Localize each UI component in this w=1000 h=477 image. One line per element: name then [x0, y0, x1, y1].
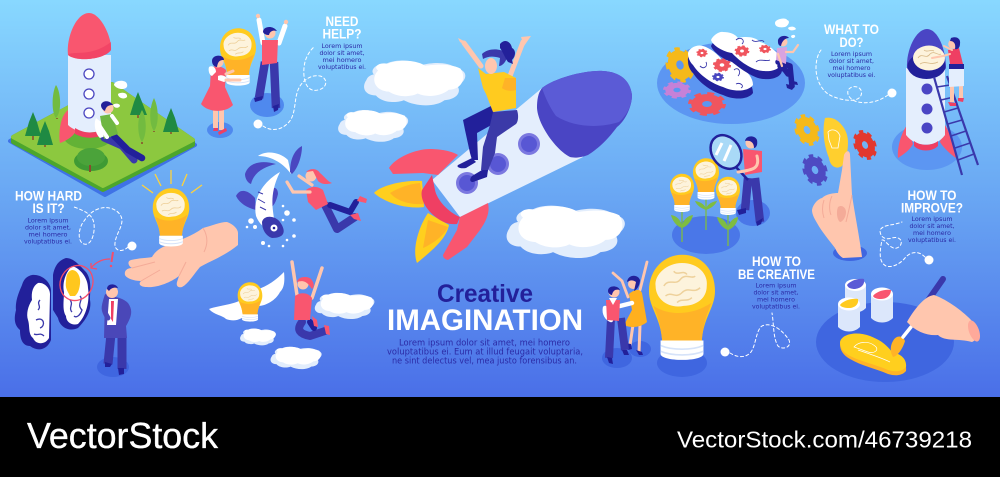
- text: how hard: [15, 188, 82, 246]
- left lobe: [688, 45, 753, 99]
- shadow: [833, 245, 867, 261]
- hand: [812, 151, 862, 258]
- text: what to do: [824, 22, 879, 79]
- text: how to be creative: dolor sit amet,: [754, 288, 798, 296]
- panel: big rocket with woman: [374, 36, 632, 263]
- big bulb: [649, 255, 715, 377]
- bubbles: [246, 205, 296, 247]
- text: need help: HELP?: [322, 26, 362, 42]
- bulb: [220, 28, 256, 86]
- text: need help: mei homero: [322, 56, 362, 64]
- text: how hard: HOW HARD: [15, 188, 82, 204]
- panel: finger with bulb and gears: [791, 112, 879, 261]
- panel: couple holding bulb: [201, 14, 288, 138]
- text: how to be creative: mei homero: [757, 296, 795, 304]
- painted bulb: [840, 334, 906, 375]
- brain: [913, 46, 945, 70]
- ladder: [934, 76, 978, 175]
- man in suit: [97, 284, 131, 377]
- title body text: voluptatibus ei. Eum at illud feugait voluptaria,: [387, 348, 583, 358]
- panel: brains with bulb: [15, 252, 113, 349]
- woman: [201, 56, 240, 135]
- text: how to improve: HOW TO: [908, 188, 956, 203]
- fins and ring: [389, 149, 489, 260]
- text: what to do: voluptatibus ei.: [828, 71, 876, 79]
- ellipse base: [816, 302, 954, 382]
- text: how hard: IS IT?: [32, 201, 64, 216]
- woman: [932, 37, 964, 106]
- dashed path: need help: [254, 46, 326, 129]
- body: [432, 88, 583, 217]
- text: what to do: DO?: [840, 35, 864, 50]
- text: how hard: voluptatibus ei.: [24, 238, 72, 246]
- text: need help: Lorem ipsum: [322, 42, 362, 50]
- rocket: [898, 29, 956, 158]
- man in vest: [605, 286, 632, 364]
- splashes: [245, 146, 302, 184]
- left brain: [15, 275, 51, 349]
- text: what to do: mei homero: [832, 64, 871, 72]
- red ring and arrow: [54, 252, 113, 307]
- text: how to improve: voluptatibus ei.: [908, 236, 956, 244]
- text: how to be creative: HOW TO: [752, 254, 801, 269]
- ellipse base: [657, 42, 805, 124]
- wrist: [966, 319, 982, 343]
- island: [10, 84, 195, 195]
- cloud 6: [271, 347, 322, 369]
- jumping woman: [292, 262, 330, 336]
- hand: [907, 295, 977, 342]
- bulb: [238, 282, 262, 322]
- text: need help: voluptatibus ei.: [318, 63, 366, 71]
- cloud 5: [240, 329, 276, 345]
- panel: fish and flying woman: [236, 146, 367, 247]
- hand: [125, 222, 238, 287]
- dashed path: be creative: [720, 313, 790, 357]
- text: what to do: dolor sit amet,: [829, 57, 874, 65]
- woman: [287, 169, 367, 229]
- text: how to improve: [901, 188, 963, 244]
- text: how to improve: Lorem ipsum: [912, 215, 952, 223]
- shadow: [892, 124, 962, 170]
- panel: brain with gears: [657, 19, 805, 124]
- man: [254, 14, 288, 112]
- panel: dancing couple: [602, 255, 715, 377]
- title body text: ne sint delectus vel, mea justo forensibus an.: [392, 356, 577, 366]
- stems: [671, 195, 738, 246]
- panel: winged bulb: [209, 272, 284, 322]
- footer: image id: VectorStock.com/46739218: [677, 426, 972, 452]
- bulb with rays: [142, 170, 202, 246]
- text: how hard: dolor sit amet,: [25, 224, 71, 232]
- text: how to be creative: [738, 254, 815, 310]
- shadows: [602, 341, 651, 368]
- text: what to do: WHAT TO: [824, 22, 879, 37]
- paint pots: [838, 279, 893, 332]
- panel: painting a bulb: [816, 279, 982, 382]
- dashed path: what to do: [816, 50, 896, 103]
- cloud 2: [338, 110, 408, 142]
- brush: [891, 279, 943, 357]
- seated man: [95, 81, 142, 160]
- text: how to be creative: BE CREATIVE: [738, 267, 815, 282]
- cloud 3: [507, 206, 625, 258]
- shadow ellipses: [207, 93, 284, 138]
- text: need help: [318, 14, 366, 71]
- wings: [209, 272, 284, 320]
- title: Creative: [437, 280, 533, 308]
- panel: hand with bulb: [125, 170, 238, 287]
- cloud 1: [364, 60, 465, 105]
- woman in yellow: [613, 262, 647, 355]
- dashed path: how hard: [74, 207, 136, 250]
- text: how to improve: dolor sit amet,: [910, 222, 954, 230]
- sitting woman: [775, 19, 798, 90]
- fish: [236, 172, 284, 238]
- title body text: [387, 338, 583, 366]
- right brain: [53, 258, 90, 330]
- gears: [791, 112, 879, 188]
- panel: rocket with ladder: [892, 29, 978, 175]
- text: what to do: Lorem ipsum: [831, 50, 872, 58]
- rocket: [59, 13, 111, 143]
- title: IMAGINATION: [387, 304, 583, 337]
- title body text: Lorem ipsum dolor sit amet, mei homero: [399, 338, 570, 348]
- dashed path: how to improve: [880, 222, 934, 267]
- panel: rocket on island: [10, 13, 195, 195]
- small bulb: [66, 270, 80, 296]
- text: need help: dolor sit amet,: [320, 49, 364, 57]
- text: how to improve: mei homero: [913, 229, 951, 237]
- bulbs: [670, 158, 740, 215]
- trees: [25, 85, 179, 172]
- right lobe: [711, 32, 782, 79]
- man with magnifier: [704, 129, 763, 226]
- windows: [456, 133, 540, 194]
- title: [387, 280, 583, 337]
- shadows: [672, 200, 770, 254]
- text: how hard: Lorem ipsum: [28, 216, 68, 224]
- footer bar: [0, 397, 1000, 477]
- bulb on finger: [824, 118, 848, 168]
- cloud 4: [315, 293, 374, 319]
- text: how to be creative: Lorem ipsum: [756, 282, 796, 290]
- woman: [457, 36, 531, 182]
- text: how to improve: IMPROVE?: [901, 200, 963, 216]
- panel: bulb flowers and magnifier: [670, 129, 770, 254]
- text: how hard: mei homero: [28, 230, 68, 238]
- footer: brand: VectorStock: [27, 415, 219, 456]
- text: need help: NEED: [326, 14, 359, 29]
- gears: [663, 46, 724, 114]
- nose: [537, 71, 632, 158]
- text: how to be creative: voluptatibus ei.: [752, 302, 800, 310]
- flames: [374, 181, 449, 263]
